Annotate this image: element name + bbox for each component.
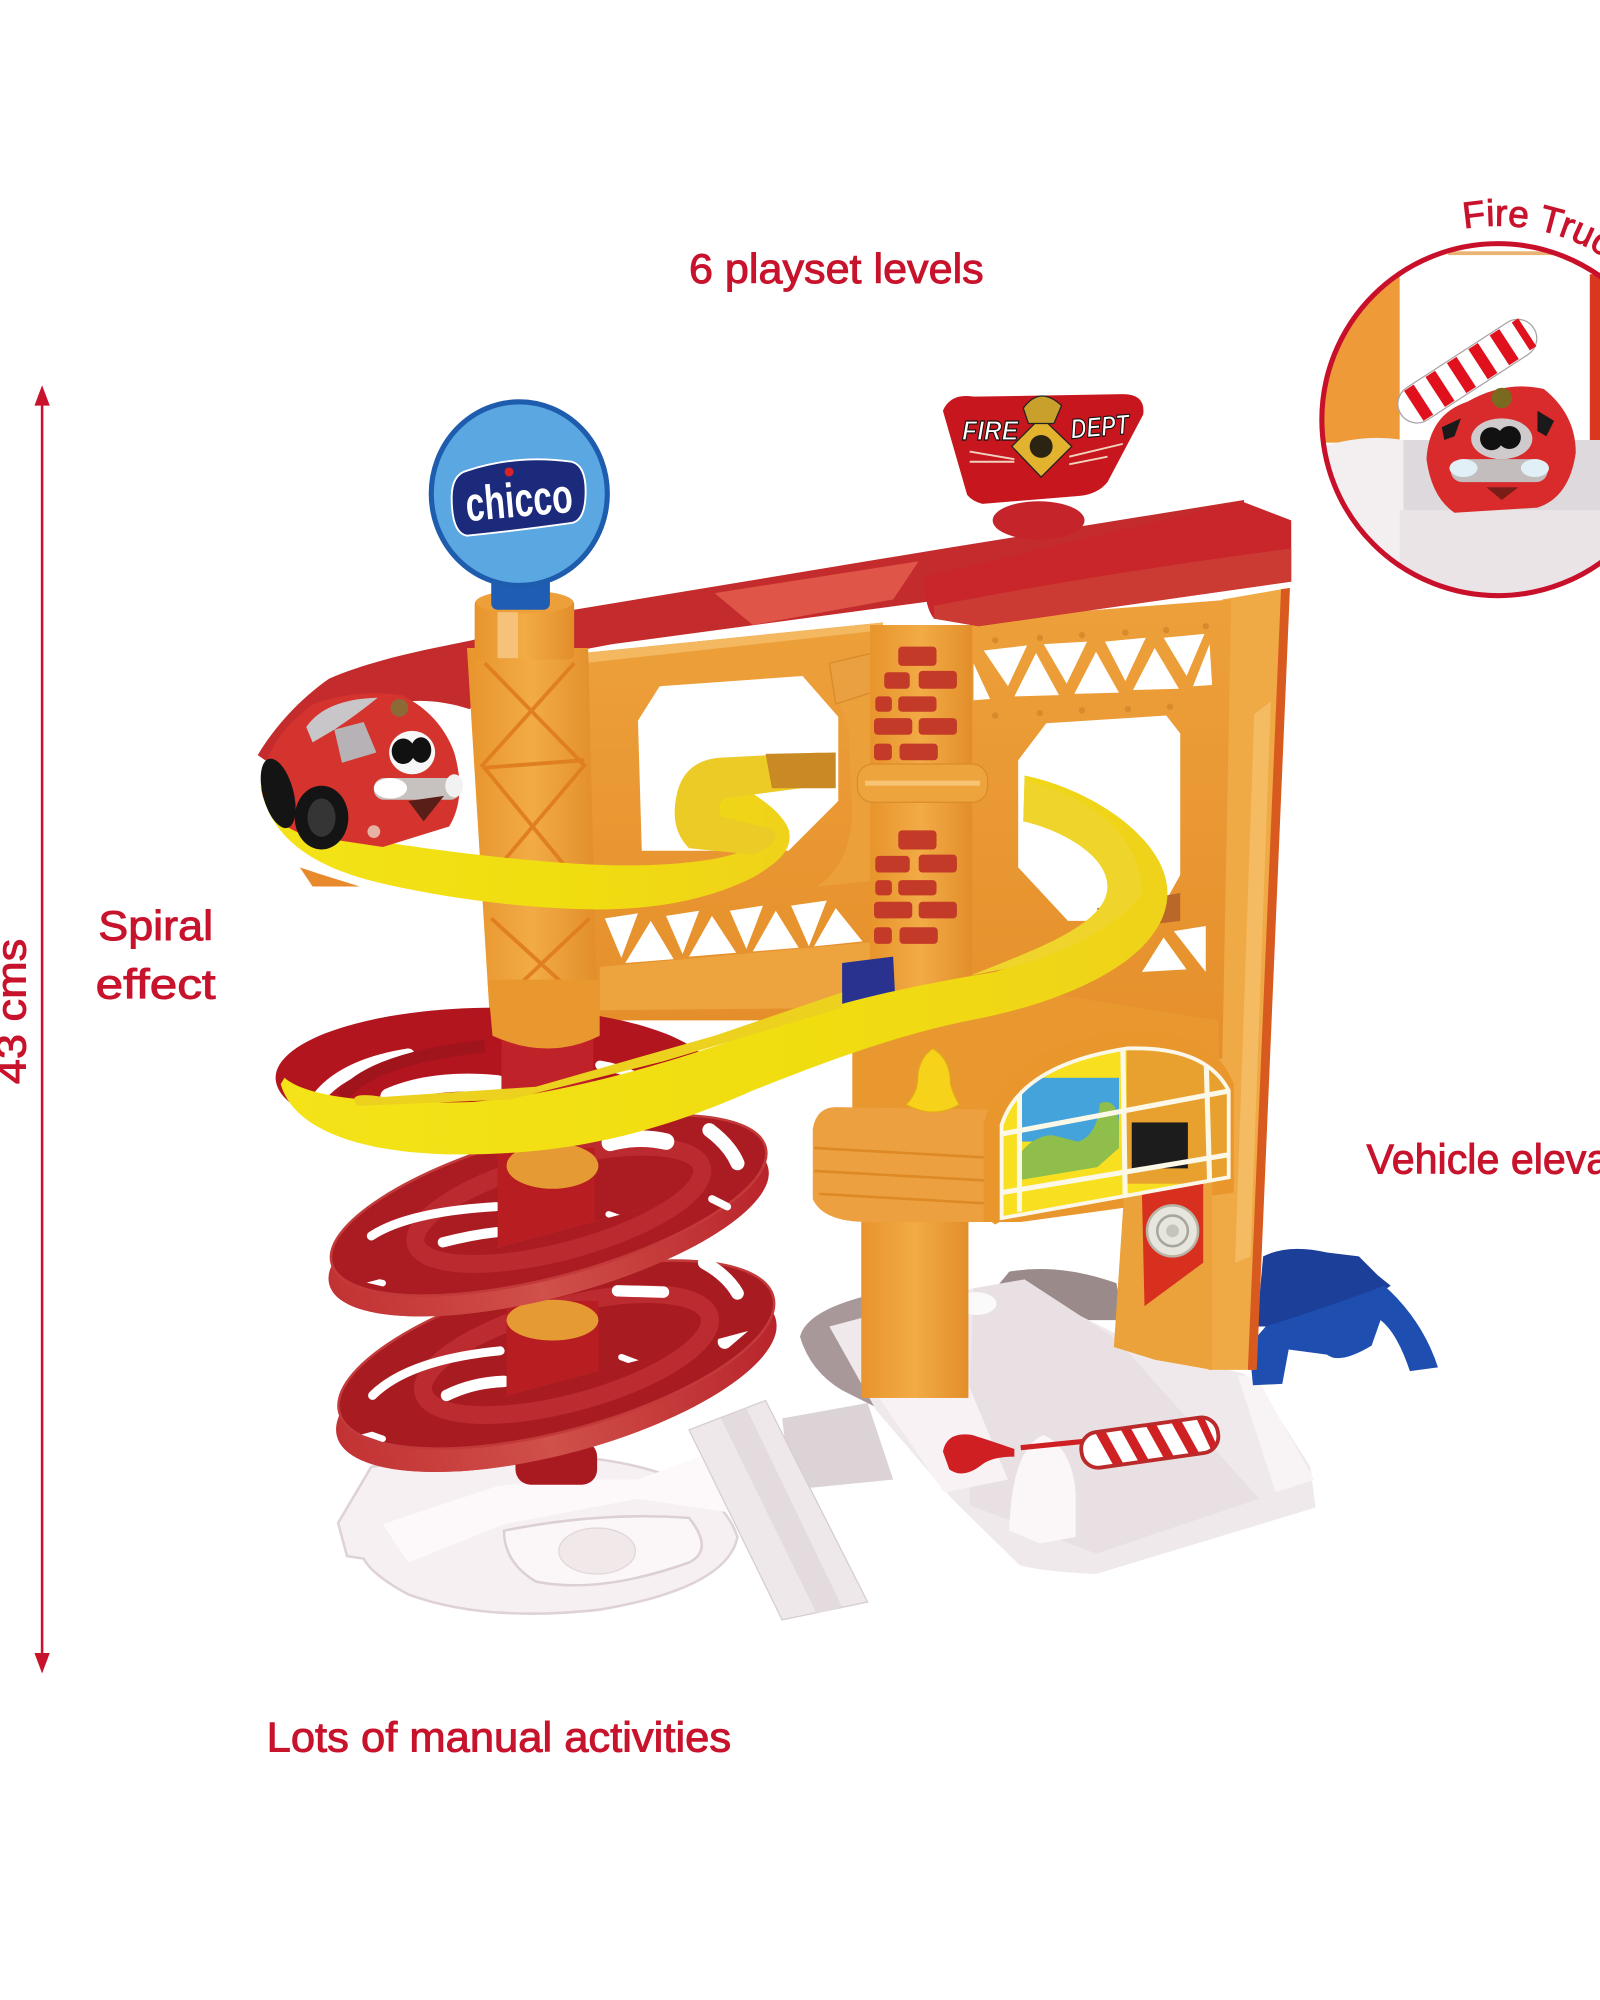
label: manual activities: Lots of manual activities — [267, 1713, 731, 1760]
blue block behind track — [842, 957, 896, 1014]
icon: flame band lower — [507, 1300, 598, 1341]
pole base — [515, 1441, 597, 1485]
top red ramp — [258, 500, 1244, 778]
upper yellow track — [260, 753, 836, 909]
label: spiral effect: Spiral — [98, 902, 213, 949]
middle spiral front — [332, 1175, 769, 1316]
label: playset levels: 6 playset levels — [689, 245, 984, 292]
arrow: height dimension — [34, 385, 50, 1673]
top-right truss and window frame — [970, 599, 1231, 1059]
window border — [1002, 1048, 1229, 1218]
connector bar between bases — [782, 1403, 893, 1490]
right base plate — [800, 1269, 1315, 1574]
lower spiral front — [338, 1324, 777, 1472]
chicco round sign: chicco — [463, 469, 575, 532]
red roof — [925, 501, 1291, 626]
arched panel surround — [984, 1030, 1234, 1222]
top spiral ramp — [276, 980, 715, 1148]
icon: bell — [906, 1048, 959, 1112]
label: spiral effect — [96, 902, 216, 1008]
inset circle: fire truck barrier — [1321, 242, 1600, 599]
middle pole section — [498, 1143, 598, 1256]
blue and brick chimney — [857, 625, 988, 1046]
bottom spiral ramp — [317, 1223, 795, 1510]
chicco round sign — [431, 402, 607, 610]
lattice column — [467, 591, 597, 1020]
left circular base — [338, 1441, 766, 1614]
lower right pillar with red target panel — [1114, 1180, 1212, 1370]
entry ramp — [689, 1401, 868, 1620]
icon: flame band upper — [507, 1143, 598, 1189]
central orange block with bell and collar — [813, 982, 1219, 1398]
fire dept sign: DEPT — [1069, 409, 1133, 445]
barrier on base — [943, 1415, 1220, 1543]
red toy car — [254, 693, 463, 849]
window illustration — [1004, 1050, 1227, 1216]
fire dept sign — [943, 394, 1143, 540]
lower yellow track — [281, 776, 1167, 1154]
blue lift lever — [1249, 1249, 1438, 1385]
lower pole section — [507, 1300, 598, 1416]
label: spiral effect: effect — [96, 961, 216, 1008]
orange bracket under track — [300, 867, 360, 886]
left tower frame with window — [583, 622, 893, 1020]
icon: fire badge — [1012, 396, 1072, 477]
middle spiral ramp — [311, 1078, 787, 1354]
fire dept sign: FIRE — [962, 415, 1019, 446]
right tower column — [1208, 588, 1290, 1370]
infographic canvas — [0, 198, 1600, 1752]
